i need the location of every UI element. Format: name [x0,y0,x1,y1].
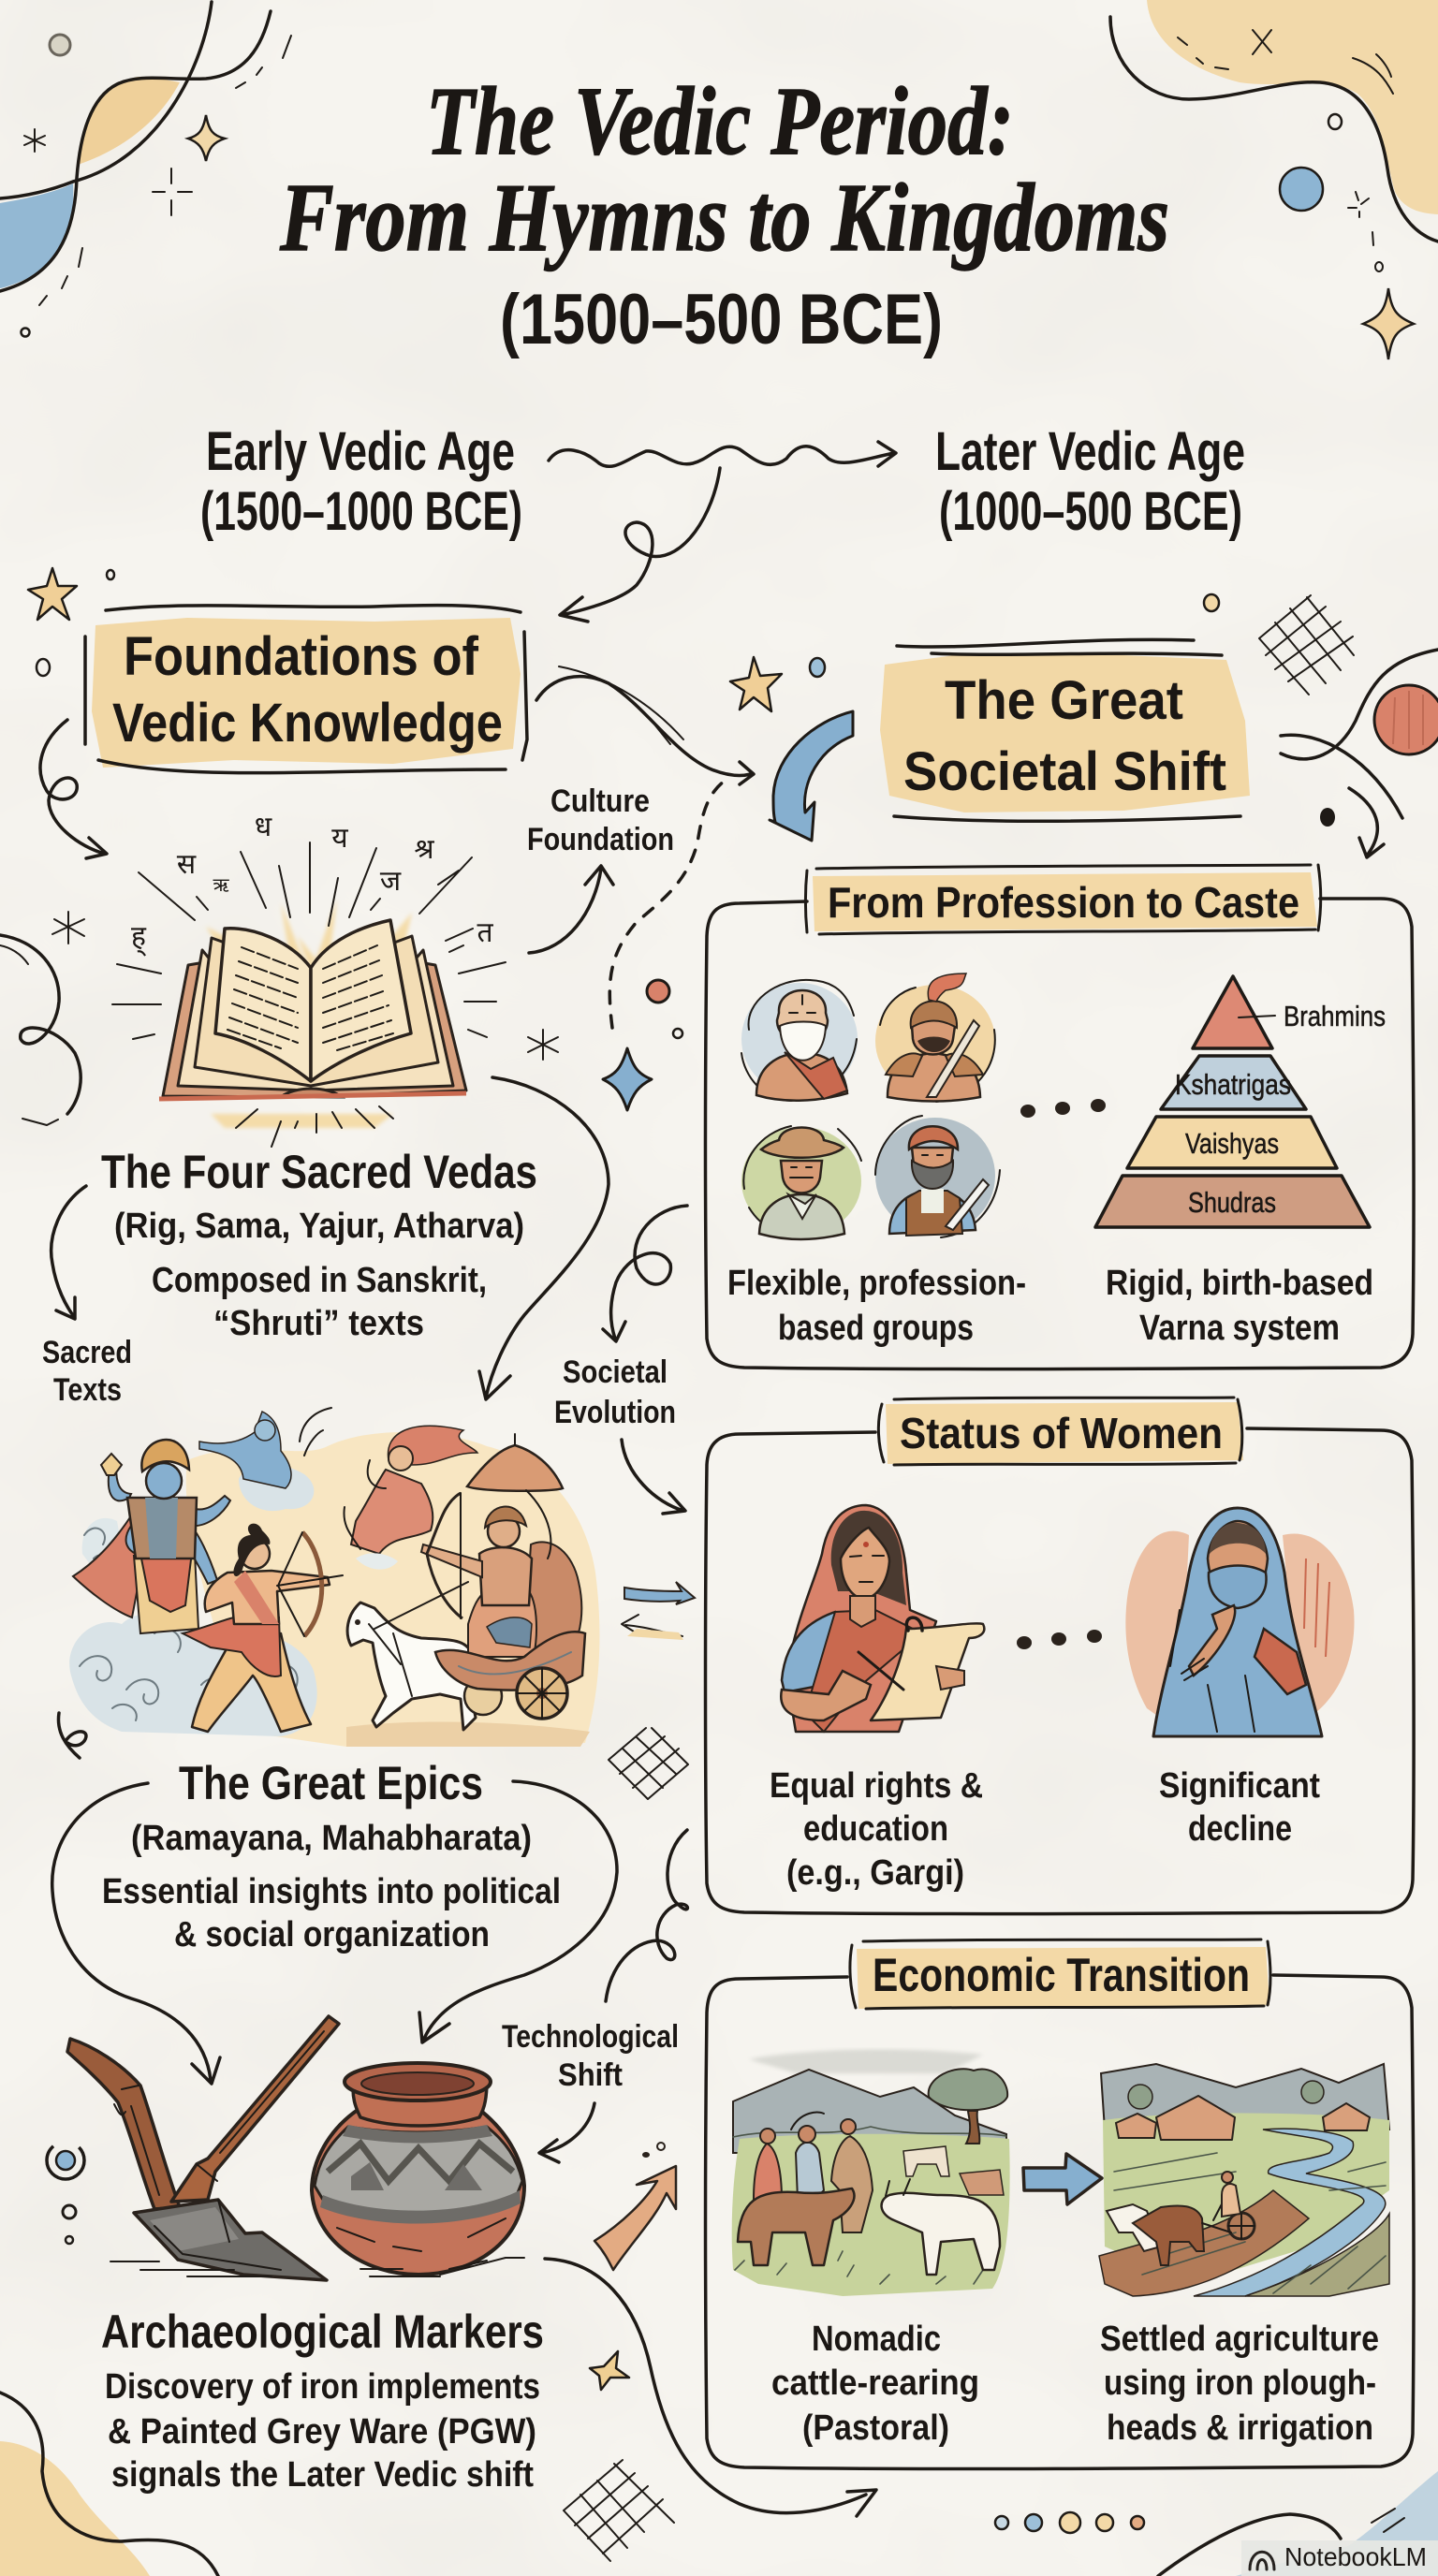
heading: the great societal shift: The Great [945,670,1183,731]
pyramid: varna system: Shudras [1188,1186,1276,1219]
heading: foundations of vedic knowledge: Foundations of [124,626,479,687]
portrait: shudra artisan [875,1116,1000,1237]
portrait: vaishya farmer [741,1126,861,1239]
decoration: top left swirl [0,2,291,337]
arrow: wavy timeline [549,442,896,466]
arrow: foundations to societal shift [536,666,754,784]
caption: equal rights: education [803,1809,948,1849]
label: societal evolution: Societal [563,1354,668,1390]
decoration: stars and circles near foundations [28,568,114,676]
panel heading: status of women: Status of Women [900,1409,1223,1457]
arrow: vedas to sacred texts [51,1186,86,1319]
caption: nomadic cattle-rearing [771,2320,979,2448]
caption: nomadic cattle-rearing: cattle-rearing [771,2364,979,2403]
pyramid: varna system: Brahmins [1284,1000,1386,1032]
caption: significant decline [1159,1766,1320,1849]
illustration: open book with sanskrit letters: स [177,848,197,881]
scene background wash [186,1432,599,1747]
arrow: vedas to epics [479,1077,609,1399]
panel heading: economic transition: Economic Transition [873,1949,1250,2001]
caption: significant decline: decline [1188,1809,1292,1849]
label: technological shift: Shift [558,2057,623,2093]
caption: rigid varna: Varna system [1139,1309,1340,1348]
panel heading: from profession to caste [805,865,1321,934]
label: later vedic age: Later Vedic Age [935,421,1245,482]
pyramid: varna system [1095,976,1386,1227]
caption: rigid varna [1106,1264,1373,1348]
illustration: open book with sanskrit letters: ज [380,865,402,898]
arrow: dashed path from sparkle [609,777,730,1028]
dots [1017,1630,1102,1649]
label: societal evolution: Evolution [554,1395,676,1430]
panel: economic transition [706,1939,1414,2469]
text block: archaeological markers: Archaeological Markers [101,2305,544,2358]
illustration: iron plough [67,2016,339,2280]
icon: peach upward arrow [594,2143,676,2270]
illustration: open book with sanskrit letters: ऋ [213,873,229,896]
label: later vedic age: (1000–500 BCE) [939,481,1242,542]
text block: the great epics: (Ramayana, Mahabharata) [131,1819,532,1858]
text block: the great epics [102,1757,561,1954]
decoration: left curl and asterisks [0,912,682,1125]
text block: archaeological markers: & Painted Grey Ware (PGW) [108,2412,536,2452]
arrows: epics to archaeological markers [52,1781,617,2084]
label: culture foundation: Foundation [527,822,674,857]
text block: the great epics: Essential insights into political [102,1872,561,1911]
icon: blue arrow between scenes [1023,2154,1102,2204]
pyramid: varna system: Kshatrigas [1175,1068,1291,1101]
title: (1500–500 BCE) [500,280,943,359]
text block: the great epics: & social organization [174,1915,490,1954]
text block: archaeological markers: signals the Later Vedic shift [111,2455,534,2495]
illustration: open book with sanskrit letters: श्र [414,833,434,866]
logo: notebooklm: NotebookLM [1284,2542,1427,2571]
clouds lower left [69,1614,317,1736]
arrow: loop to technological shift [606,1830,687,2001]
heading: foundations of vedic knowledge [85,606,527,773]
decoration: top right swirl [1110,0,1438,359]
icon: blue curved arrow [770,711,853,841]
decoration: star and hatch bottom [564,2351,674,2561]
flying blue figure with cloud [199,1408,331,1511]
illustration: open book with sanskrit letters: त [477,916,493,949]
arrow: societal evolution to status of women [622,1440,685,1514]
arrow: timeline to foundations [560,468,720,622]
panel heading: status of women [878,1398,1243,1465]
illustration: veiled woman [1125,1508,1355,1736]
arrow: pottery to economic transition [545,2259,876,2516]
label: culture foundation: Culture [550,783,650,819]
illustration: painted grey ware pot [312,2063,524,2276]
label: later vedic age [935,421,1245,542]
label: early vedic age [200,421,522,542]
text block: archaeological markers [101,2305,544,2495]
illustration: open book with sanskrit letters: ह् [131,920,147,957]
heading: foundations of vedic knowledge: Vedic Knowledge [112,693,503,754]
portrait: brahmin sage [741,980,858,1101]
arrow: technological shift to pot [539,2103,594,2162]
text block: the four sacred vedas: “Shruti” texts [213,1304,424,1343]
label: culture foundation [527,783,674,857]
panel: from profession to caste [706,865,1414,1369]
panel heading: economic transition [850,1939,1270,2009]
panel heading: from profession to caste: From Profession to Caste [828,878,1299,927]
text block: the four sacred vedas: The Four Sacred Vedas [101,1146,537,1198]
decoration: bottom left blob and circles [0,2142,218,2576]
pyramid: varna system: Vaishyas [1185,1127,1279,1160]
label: early vedic age: Early Vedic Age [206,421,515,482]
caption: settled agriculture [1100,2320,1379,2448]
caption: flexible groups [727,1264,1026,1348]
title: The Vedic Period: [426,67,1014,175]
horse [347,1582,476,1730]
title [279,67,1169,359]
heading: the great societal shift [880,639,1250,821]
caption: equal rights: Equal rights & [770,1766,983,1806]
decoration: curl and hatch beside epics [58,1713,688,1799]
caption: significant decline: Significant [1159,1766,1320,1806]
arrow: foundations to vedas [40,720,107,858]
text block: the four sacred vedas [101,1146,537,1343]
illustration: open book with sanskrit letters: ध [255,811,272,843]
decoration: star, circle, hatch, red ball [730,594,1438,827]
dots [1020,1099,1106,1118]
caption: settled agriculture: heads & irrigation [1107,2408,1373,2448]
caption: settled agriculture: Settled agriculture [1100,2320,1379,2359]
arrow: book to culture foundation [529,866,613,953]
caption: nomadic cattle-rearing: (Pastoral) [802,2408,949,2448]
illustration: open book with sanskrit letters: य [331,822,348,855]
portrait: kshatriya warrior [875,973,995,1102]
illustration: pastoral scene [732,2050,1010,2296]
illustration: educated woman [781,1505,984,1732]
label: societal evolution [554,1354,676,1430]
caption: rigid varna: Rigid, birth-based [1106,1264,1373,1303]
logo: notebooklm [1241,2540,1438,2576]
label: technological shift [502,2019,679,2093]
text block: archaeological markers: Discovery of iron implements [105,2367,540,2407]
caption: flexible groups: Flexible, profession- [727,1264,1026,1303]
label: early vedic age: (1500–1000 BCE) [200,481,522,542]
blue god figure [73,1440,230,1633]
decoration: bottom row of dots [995,2512,1144,2533]
caption: equal rights: (e.g., Gargi) [786,1853,964,1893]
label: sacred texts [42,1335,132,1408]
illustration: settled agriculture scene [1099,2064,1389,2296]
label: technological shift: Technological [502,2019,679,2055]
illustration: open book with sanskrit letters [112,811,506,1147]
decoration: bottom right blue corner [1158,2471,1438,2576]
panel: status of women [706,1398,1414,1914]
arrow: societal evolution loop [603,1206,687,1341]
text block: the four sacred vedas: (Rig, Sama, Yajur, Atharva) [114,1207,524,1246]
label: sacred texts: Sacred [42,1335,132,1370]
caption: flexible groups: based groups [778,1309,974,1348]
chariot and warrior [421,1434,585,1719]
archer [183,1524,343,1732]
arrows: blue two way arrows [622,1582,695,1640]
title: From Hymns to Kingdoms [279,164,1169,271]
caption: settled agriculture: using iron plough- [1104,2364,1376,2403]
heading: the great societal shift: Societal Shift [903,741,1226,802]
label: sacred texts: Texts [53,1372,122,1408]
caption: equal rights [770,1766,983,1893]
arrows: shift to panels [1281,650,1438,857]
text block: the great epics: The Great Epics [179,1757,483,1809]
illustration: epics battle scene [69,1408,599,1747]
flying woman [344,1426,477,1570]
caption: nomadic cattle-rearing: Nomadic [812,2320,941,2359]
text block: the four sacred vedas: Composed in Sanskrit, [152,1261,487,1300]
